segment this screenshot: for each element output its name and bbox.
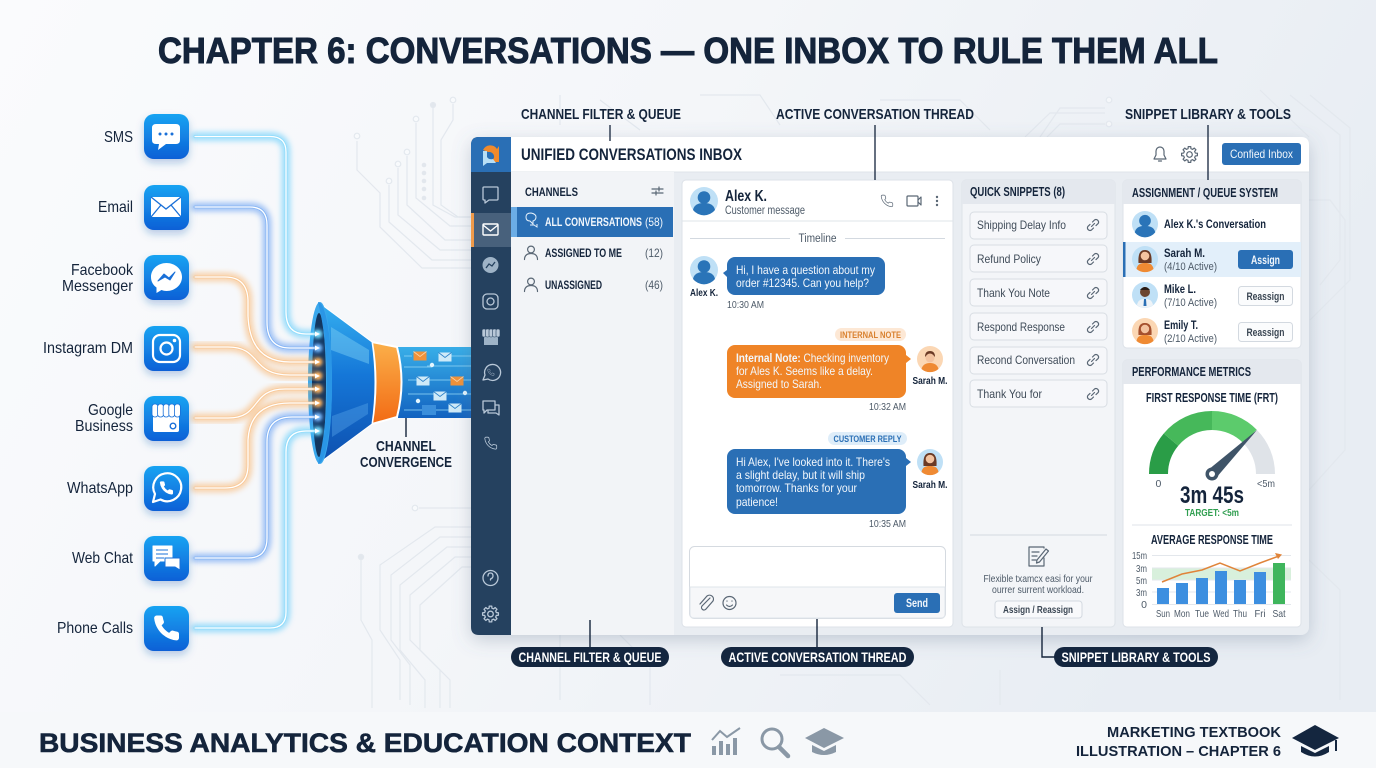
channel: Google Business: Business — [75, 418, 133, 435]
thread header — [682, 187, 953, 221]
icon: sidebar store — [482, 329, 500, 345]
chart: average response time — [1132, 533, 1291, 620]
icon: sidebar messenger — [482, 257, 498, 273]
panel: assignment queue system: ASSIGNMENT / QUEUE SYSTEM — [1132, 186, 1278, 200]
callout pill: active conversation thread: ACTIVE CONVERSATION THREAD — [728, 649, 906, 665]
icon: magnifier — [762, 729, 788, 756]
channel: Facebook Messenger: Messenger — [62, 278, 134, 295]
line: Instagram DM — [195, 347, 318, 375]
channel: Instagram DM — [43, 326, 189, 371]
callout pill: channel filter and queue — [511, 620, 669, 667]
chart: average response time: Fri — [1254, 608, 1266, 620]
message: customer reply: CUSTOMER REPLY — [834, 434, 902, 445]
panel: active conversation thread — [682, 180, 953, 627]
footer source note — [1076, 724, 1281, 760]
gauge: first response time: TARGET: <5m — [1185, 507, 1239, 519]
row: Sarah M.: (4/10 Active) — [1164, 261, 1217, 273]
gauge: first response time: FIRST RESPONSE TIME (FRT) — [1146, 391, 1278, 405]
message: customer reply: Sarah M. — [912, 479, 948, 491]
snippet: shipping delay info — [970, 212, 1107, 239]
message: Alex K.: Alex K. — [690, 288, 718, 299]
row: all conversations — [511, 207, 673, 237]
message: internal note: Sarah M. — [912, 375, 948, 387]
row: all conversations: (58) — [645, 215, 663, 229]
row: Mike L.: Reassign — [1246, 291, 1285, 303]
message: customer reply: tomorrow. Thanks for your — [736, 481, 857, 495]
row: Emily T.: Emily T. — [1164, 318, 1198, 332]
channel: SMS: SMS — [104, 129, 133, 146]
funnel entry glow points — [314, 330, 322, 435]
callout: channel filter and queue top: CHANNEL FILTER & QUEUE — [521, 106, 681, 123]
icon: graduation cap — [805, 728, 844, 755]
row: all conversations: ALL CONVERSATIONS — [545, 215, 642, 229]
line: Google Business — [195, 389, 318, 418]
snippet: thank you for: Thank You for — [977, 387, 1042, 401]
channel: Email: Email — [98, 199, 133, 216]
snippet: refund policy: Refund Policy — [977, 252, 1041, 266]
line: Phone Calls — [195, 431, 318, 628]
snippet: thank you for — [970, 380, 1107, 407]
channel: WhatsApp — [67, 466, 189, 511]
channel: Facebook Messenger — [62, 255, 189, 300]
row: Mike L. — [1132, 282, 1292, 309]
compose box: Send — [906, 596, 928, 610]
footer source note: ILLUSTRATION – CHAPTER 6 — [1076, 743, 1281, 760]
funnel — [308, 302, 402, 464]
panel: performance metrics: PERFORMANCE METRICS — [1132, 365, 1251, 379]
chart: average response time: Tue — [1195, 608, 1209, 620]
callout: channel convergence — [360, 418, 452, 471]
thread header: Customer message — [725, 205, 805, 217]
chart: average response time: AVERAGE RESPONSE TIME — [1151, 533, 1273, 547]
timeline divider: Timeline — [798, 233, 836, 245]
tools note: Flexible txamcx easi for your — [984, 573, 1093, 585]
chart: average response time: Mon — [1174, 608, 1190, 620]
chart: average response time: 3m — [1136, 563, 1147, 575]
message: customer reply: 10:35 AM — [869, 518, 906, 530]
top bar — [511, 137, 1309, 172]
circuit background pattern — [354, 90, 1350, 708]
callout: snippet library and tools top: SNIPPET LIBRARY & TOOLS — [1125, 106, 1291, 123]
row: Emily T.: (2/10 Active) — [1164, 333, 1217, 345]
row: Mike L.: Mike L. — [1164, 282, 1196, 296]
snippet: recond conversation — [970, 347, 1107, 374]
footer source note: MARKETING TEXTBOOK — [1107, 724, 1281, 741]
top bar: Confied Inbox — [1230, 147, 1293, 161]
tools note — [984, 547, 1093, 618]
channel: WhatsApp: WhatsApp — [67, 480, 133, 497]
sidebar — [471, 137, 511, 635]
icon: sidebar web chat — [483, 401, 499, 415]
callout pill: active conversation thread — [721, 619, 914, 667]
tools note: ourrer surrent workload. — [992, 584, 1084, 596]
line: Facebook Messenger — [195, 277, 318, 362]
row: Emily T.: Reassign — [1246, 327, 1285, 339]
chart: average response time: 15m — [1132, 550, 1147, 562]
snippet: refund policy — [970, 245, 1107, 272]
channel: Google Business: Google — [88, 402, 133, 419]
panel: quick snippets — [962, 180, 1115, 627]
chart: average response time: 3m — [1136, 587, 1147, 599]
channel connector lines — [195, 136, 318, 628]
callout pill: snippet library and tools: SNIPPET LIBRARY & TOOLS — [1062, 649, 1210, 665]
channel: Web Chat: Web Chat — [72, 550, 133, 567]
chart: average response time: Thu — [1233, 608, 1247, 620]
panel: quick snippets: QUICK SNIPPETS (8) — [970, 185, 1065, 199]
icon: sidebar help — [483, 570, 498, 586]
row: Alex K. conversation: Alex K.'s Conversation — [1164, 217, 1266, 231]
channel: Email — [98, 185, 189, 230]
row: unassigned — [524, 278, 663, 292]
row: unassigned: (46) — [645, 278, 663, 292]
tools note: Assign / Reassign — [1003, 605, 1073, 616]
channel: Phone Calls — [57, 606, 189, 651]
row: Sarah M.: Sarah M. — [1164, 246, 1205, 260]
snippet: thank you note — [970, 279, 1107, 306]
line: WhatsApp — [195, 403, 318, 488]
gauge: first response time — [1146, 391, 1278, 519]
conveyor of messages out of funnel — [398, 347, 472, 418]
icon: sidebar settings — [483, 606, 498, 622]
icon: sidebar phone — [485, 437, 497, 449]
message: customer reply: patience! — [736, 495, 778, 509]
icon: analytics chart — [712, 728, 740, 755]
callout: channel convergence: CONVERGENCE — [360, 454, 452, 471]
panel: channel filter and queue — [511, 172, 674, 635]
row: Mike L.: (7/10 Active) — [1164, 297, 1217, 309]
panel: assignment queue system — [1123, 180, 1301, 348]
message: Alex K.: order #12345. Can you help? — [736, 276, 869, 290]
icon: sidebar chat — [483, 187, 498, 203]
icon: navy graduation cap — [1292, 725, 1339, 756]
chart: average response time: Sat — [1272, 608, 1286, 620]
channel: Web Chat — [72, 536, 189, 581]
message: customer reply: Hi Alex, I've looked into it. There's — [736, 455, 890, 469]
message: Alex K.: 10:30 AM — [727, 299, 764, 311]
row: assigned to me: (12) — [645, 246, 663, 260]
channel: Google Business — [75, 396, 189, 441]
callout: active conversation thread top: ACTIVE CONVERSATION THREAD — [776, 106, 974, 123]
message: internal note: Assigned to Sarah. — [736, 377, 822, 391]
chart: average response time: 5m — [1136, 575, 1147, 587]
row: Sarah M. — [1123, 242, 1301, 277]
callout pill: channel filter and queue: CHANNEL FILTER & QUEUE — [518, 649, 662, 665]
message: internal note: Internal Note: Checking inventory — [736, 351, 889, 365]
icon: sidebar instagram — [483, 294, 498, 309]
channel: SMS — [104, 114, 189, 159]
message: Alex K. — [690, 256, 885, 311]
row: Sarah M.: Assign — [1251, 255, 1280, 267]
chart: average response time: Wed — [1213, 608, 1229, 620]
message: internal note — [727, 328, 948, 413]
thread header: Alex K. — [725, 188, 767, 205]
line: Email — [195, 207, 318, 348]
snippet: respond response — [970, 313, 1107, 340]
footer heading: BUSINESS ANALYTICS & EDUCATION CONTEXT — [39, 728, 692, 758]
app window — [471, 137, 1309, 635]
panel: performance metrics — [1123, 360, 1301, 627]
channel: Instagram DM: Instagram DM — [43, 340, 133, 357]
panel: channel filter and queue: CHANNELS — [525, 185, 578, 199]
gauge: first response time: 3m 45s — [1180, 482, 1244, 509]
message: internal note: 10:32 AM — [869, 401, 906, 413]
gauge: first response time: 0 — [1156, 478, 1162, 490]
row: unassigned: UNASSIGNED — [545, 278, 602, 292]
chart: average response time: 0 — [1141, 599, 1147, 611]
row: Emily T. — [1132, 318, 1292, 345]
message: internal note: INTERNAL NOTE — [840, 330, 901, 341]
icon: sidebar mail — [483, 224, 498, 235]
snippet: respond response: Respond Response — [977, 320, 1065, 334]
row: Alex K. conversation — [1132, 211, 1266, 237]
message: customer reply: a slight delay, but it will ship — [736, 468, 865, 482]
chart: average response time: Sun — [1156, 608, 1170, 620]
gauge: first response time: <5m — [1257, 478, 1275, 490]
top bar: UNIFIED CONVERSATIONS INBOX — [521, 145, 743, 164]
message: Alex K.: Hi, I have a question about my — [736, 263, 875, 277]
footer band — [0, 712, 1376, 768]
message: internal note: for Ales K. Seems like a delay. — [736, 364, 873, 378]
message: customer reply — [727, 432, 948, 530]
snippet: recond conversation: Recond Conversation — [977, 353, 1075, 367]
snippet: thank you note: Thank You Note — [977, 286, 1050, 300]
compose box — [690, 546, 946, 618]
channel: Facebook Messenger: Facebook — [71, 262, 134, 279]
icon: sidebar whatsapp — [483, 364, 501, 380]
row: assigned to me: ASSIGNED TO ME — [545, 246, 622, 260]
callout pill: snippet library and tools — [1042, 627, 1218, 667]
snippet: shipping delay info: Shipping Delay Info — [977, 218, 1066, 232]
line: SMS — [195, 136, 318, 334]
line: Web Chat — [195, 417, 318, 558]
title: CHAPTER 6: CONVERSATIONS — ONE INBOX TO RULE THEM ALL — [158, 30, 1218, 71]
callout: channel convergence: CHANNEL — [376, 438, 436, 455]
channel: Phone Calls: Phone Calls — [57, 620, 133, 637]
